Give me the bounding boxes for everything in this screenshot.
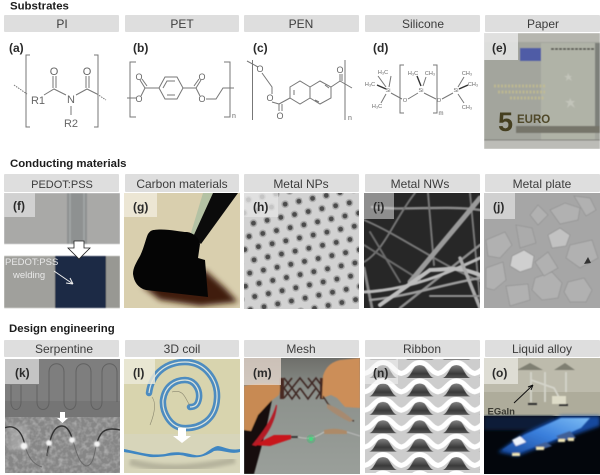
header: Serpentine: Serpentine	[35, 342, 93, 356]
header: Metal NPs: Metal NPs	[273, 177, 329, 191]
header: Metal NPs	[244, 174, 359, 192]
panel: PEDOT:PSS photos (f): welding	[12, 270, 45, 281]
header: Carbon materials: Carbon materials	[136, 177, 228, 191]
panel: Silicone structure (d): CH₃	[462, 71, 472, 77]
panel: Silicone structure (d): H₃C	[408, 71, 418, 77]
panel: PI structure (a): (a)	[9, 41, 24, 55]
header: Silicone	[365, 15, 480, 32]
header: Metal NWs: Metal NWs	[391, 177, 449, 191]
panel: PI structure (a): R1	[31, 95, 45, 107]
header: 3D coil: 3D coil	[164, 342, 200, 356]
heading: Conducting materials: Conducting materials	[10, 158, 126, 170]
panel: PEN structure (c)	[247, 41, 352, 122]
header: Metal plate	[485, 174, 600, 192]
panel: PET structure (b): (b)	[133, 41, 148, 55]
header: PI	[4, 15, 119, 32]
panel: PEDOT:PSS photos (f): PEDOT:PSS	[5, 257, 58, 268]
panel: Silicone structure (d): CH₃	[468, 82, 478, 88]
panel: Silicone structure (d): H₃C	[378, 70, 388, 76]
panel: Ribbon pattern (n)	[365, 359, 480, 473]
header: Mesh: Mesh	[286, 342, 316, 356]
panel: Silicone structure (d): Si	[419, 88, 423, 94]
panel: 3D coil photo (l): (l)	[133, 366, 144, 380]
header: Liquid alloy: Liquid alloy	[512, 342, 572, 356]
panel: PEN structure (c): O	[276, 111, 284, 121]
panel: Liquid alloy photos (o)	[484, 358, 600, 474]
panel: PI structure (a): N	[67, 94, 75, 106]
panel: Silicone structure (d): O	[437, 98, 442, 104]
panel: Serpentine photos (k): (k)	[15, 366, 30, 380]
heading: Design engineering: Design engineering	[9, 323, 115, 335]
header: PET	[125, 15, 239, 32]
panel: Mesh photo (m)	[244, 358, 360, 474]
panel: Paper photo (e): EURO	[517, 114, 550, 126]
panel: PET structure (b): O	[198, 94, 206, 104]
header: PEN	[244, 15, 359, 32]
header: PEDOT:PSS	[4, 174, 119, 192]
panel: Silicone structure (d)	[365, 41, 478, 117]
header: Carbon materials	[125, 174, 239, 192]
panel: Silicone structure (d): H₃C	[372, 104, 382, 110]
panel: PEN structure (c): n	[348, 115, 352, 122]
panel: PEN structure (c): O	[256, 64, 264, 74]
header: PEN: PEN	[289, 17, 313, 31]
heading: Substrates: Substrates	[10, 0, 69, 12]
panel: Paper photo (e): 5	[498, 107, 513, 137]
panel: Carbon materials photo (g): (g)	[133, 200, 148, 214]
panel: Silicone structure (d): CH₃	[425, 71, 435, 77]
panel: Metal NWs micrograph (i): (i)	[373, 200, 384, 214]
panel: PET structure (b): O	[198, 72, 206, 82]
panel: Metal plate micrograph (j): (j)	[493, 200, 504, 214]
panel: Paper photo (e): (e)	[492, 41, 507, 55]
panel: PI structure (a)	[9, 41, 106, 130]
panel: Carbon materials photo (g)	[124, 193, 240, 308]
panel: Silicone structure (d): m	[438, 111, 444, 117]
header: PI: PI	[56, 17, 68, 31]
header: Ribbon: Ribbon	[403, 342, 441, 356]
panel: Silicone structure (d): (d)	[373, 41, 388, 55]
header: PET: PET	[170, 17, 194, 31]
header: PEDOT:PSS: PEDOT:PSS	[31, 179, 93, 191]
header: Metal plate: Metal plate	[513, 177, 572, 191]
panel: PI structure (a): O	[50, 66, 59, 78]
header: 3D coil	[125, 340, 239, 357]
panel: Liquid alloy photos (o): (o)	[492, 366, 507, 380]
panel: PEDOT:PSS photos (f)	[4, 193, 120, 308]
panel: Serpentine photos (k)	[4, 359, 120, 473]
panel: Silicone structure (d): Si	[386, 88, 390, 94]
panel: PET structure (b): O	[135, 94, 143, 104]
panel: Silicone structure (d): Si	[454, 88, 458, 94]
panel: PEN structure (c): O	[336, 65, 344, 75]
panel: PI structure (a): R2	[64, 118, 78, 130]
panel: PEN structure (c): O	[266, 93, 274, 103]
panel: Metal plate micrograph (j)	[484, 193, 600, 308]
panel: PI structure (a): O	[83, 66, 92, 78]
panel: PEDOT:PSS photos (f): (f)	[13, 199, 25, 213]
panel: 3D coil photo (l)	[124, 359, 240, 473]
panel: Liquid alloy photos (o): EGaIn	[488, 406, 515, 418]
header: Silicone: Silicone	[402, 17, 444, 31]
panel: Silicone structure (d): H₃C	[365, 82, 375, 88]
panel: PET structure (b)	[127, 41, 236, 120]
header: Paper: Paper	[527, 17, 559, 31]
panel: PET structure (b): n	[232, 113, 236, 120]
header: Ribbon	[365, 340, 480, 357]
panel: Paper photo (e)	[484, 33, 600, 149]
panel: Silicone structure (d): CH₃	[462, 105, 472, 111]
header: Serpentine	[4, 340, 119, 357]
panel: PEN structure (c): (c)	[253, 41, 268, 55]
panel: Metal NWs micrograph (i)	[364, 193, 480, 308]
header: Mesh	[244, 340, 359, 357]
header: Paper	[485, 15, 600, 32]
header: Liquid alloy	[485, 340, 600, 357]
panel: PET structure (b): O	[135, 72, 143, 82]
panel: Metal NPs micrograph (h): (h)	[253, 200, 268, 214]
header: Metal NWs	[365, 174, 480, 192]
panel: Mesh photo (m): (m)	[253, 366, 272, 380]
panel: Silicone structure (d): O	[403, 98, 408, 104]
panel: Ribbon pattern (n): (n)	[373, 366, 388, 380]
panel: Metal NPs micrograph (h)	[244, 193, 359, 309]
